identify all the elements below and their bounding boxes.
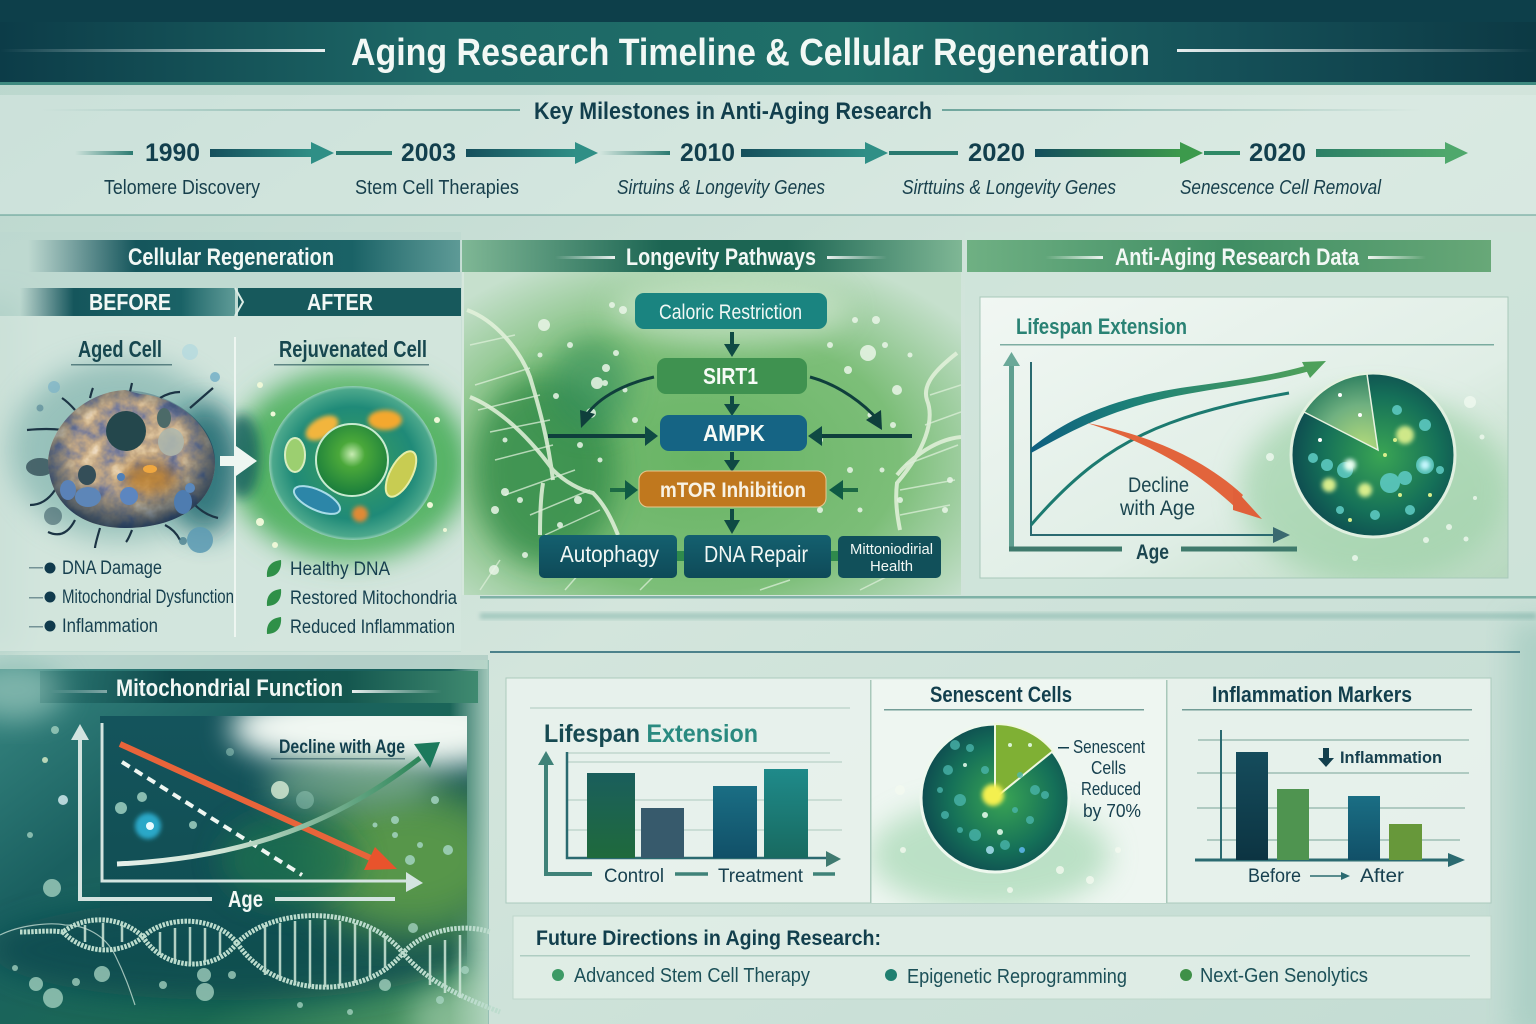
particles — [12, 726, 469, 1015]
icon: aged cell — [26, 344, 220, 553]
card sparkles — [1266, 396, 1484, 561]
icon: rejuvenated cell — [253, 363, 453, 563]
milestone 2020 second — [1180, 139, 1468, 199]
arrow: caloric to sirt1 — [724, 332, 740, 357]
node: ampk — [660, 415, 807, 451]
arrow: ampk to mtor — [724, 452, 740, 472]
dna helix — [0, 916, 500, 1012]
data heading: Anti-Aging Research Data — [1115, 244, 1360, 271]
age label: Age — [228, 886, 263, 912]
milestone 2020 first — [889, 139, 1203, 199]
node: autophagy: Autophagy — [560, 541, 659, 567]
cellular regeneration heading — [28, 240, 460, 272]
node: dna repair: DNA Repair — [704, 541, 808, 567]
milestone 2010: 2010 — [680, 139, 735, 167]
rejuvenated cell label: Rejuvenated Cell — [279, 336, 427, 362]
mito chart — [71, 716, 467, 959]
decline label: Decline with Age — [279, 737, 405, 758]
before after bar: AFTER — [307, 289, 373, 315]
connectors between outcome boxes — [670, 551, 844, 561]
milestone 2020 first: 2020 — [968, 139, 1025, 167]
card: lifespan bar chart: Lifespan Extension — [544, 720, 758, 748]
after list: Reduced Inflammation — [290, 617, 455, 638]
node: caloric restriction — [635, 293, 827, 329]
mito heading: Mitochondrial Function — [116, 675, 343, 702]
timeline heading: Key Milestones in Anti-Aging Research — [534, 98, 932, 125]
node: ampk: AMPK — [703, 420, 765, 446]
card: senescent cells: Reduced — [1081, 779, 1141, 799]
card: senescent cells: Senescent Cells — [930, 682, 1072, 707]
line chart: Decline — [1128, 474, 1189, 497]
before list — [29, 558, 234, 637]
title banner: Aging Research Timeline & Cellular Regeneration — [351, 32, 1150, 74]
node: mtor inhibition — [639, 471, 826, 507]
card: senescent cells: by 70% — [1083, 801, 1141, 821]
node: dna repair — [684, 535, 831, 578]
line chart: with Age — [1119, 497, 1195, 520]
after list — [267, 559, 457, 638]
node: mtor inhibition: mTOR Inhibition — [660, 479, 806, 502]
lifespan chart card — [980, 297, 1510, 585]
after list: Restored Mitochondria — [290, 588, 457, 609]
milestone 2010: Sirtuins & Longevity Genes — [617, 177, 825, 199]
timeline section — [0, 95, 1536, 216]
milestone 2003: Stem Cell Therapies — [355, 177, 519, 199]
card: inflammation markers — [1182, 682, 1472, 887]
milestone 2010 — [600, 139, 888, 199]
section rules — [480, 596, 1536, 653]
pie: cell particles — [1291, 373, 1455, 537]
before list: Inflammation — [62, 616, 158, 637]
card: inflammation markers: Before — [1248, 866, 1301, 887]
card: senescent cells — [870, 680, 1168, 910]
milestone 2003: 2003 — [401, 139, 456, 167]
panel: future directions: Next-Gen Senolytics — [1200, 965, 1368, 987]
line chart — [1003, 352, 1326, 564]
before list: Mitochondrial Dysfunction — [62, 587, 234, 608]
card: senescent cells: Senescent — [1073, 737, 1145, 757]
panel: future directions: Epigenetic Reprogramming — [907, 966, 1127, 988]
milestone 1990 — [75, 139, 334, 199]
node: sirt1 — [657, 358, 807, 394]
panel: future directions: Advanced Stem Cell Therapy — [574, 965, 810, 987]
milestone 2020 second: Senescence Cell Removal — [1180, 177, 1381, 199]
line chart: Age — [1136, 541, 1169, 564]
cellular regeneration heading: Cellular Regeneration — [128, 244, 334, 271]
card: lifespan bar chart: Treatment — [718, 866, 804, 887]
panel: cellular regeneration — [0, 232, 470, 652]
longevity heading — [462, 240, 962, 272]
panel: mitochondrial function — [0, 655, 550, 1024]
node: mitochondrial health: Health — [870, 558, 913, 575]
milestone 2020 first: Sirttuins & Longevity Genes — [902, 177, 1116, 199]
panel: bottom charts — [506, 678, 1491, 910]
milestone 1990: Telomere Discovery — [104, 177, 260, 199]
card: lifespan bar chart: Control — [604, 866, 664, 887]
after list: Healthy DNA — [290, 559, 390, 580]
panel: future directions — [513, 916, 1491, 999]
card: inflammation markers: Inflammation — [1340, 748, 1442, 767]
milestone 2020 second: 2020 — [1249, 139, 1306, 167]
aged cell label: Aged Cell — [78, 336, 162, 362]
panel: longevity pathways — [462, 240, 962, 595]
node: autophagy — [539, 535, 677, 578]
before after bar — [20, 288, 461, 316]
card: inflammation markers: Inflammation Markers — [1212, 682, 1412, 707]
arrow: sirt1 to ampk — [724, 396, 740, 416]
node: caloric restriction: Caloric Restriction — [659, 301, 802, 324]
after background — [224, 370, 470, 560]
milestone 1990: 1990 — [145, 139, 200, 167]
before list: DNA Damage — [62, 558, 162, 579]
node: sirt1: SIRT1 — [703, 363, 758, 389]
node: mitochondrial health — [838, 536, 941, 578]
node: mitochondrial health: Mittoniodirial — [850, 541, 933, 558]
before after bar: BEFORE — [89, 289, 171, 315]
card: senescent cells: Cells — [1091, 758, 1126, 778]
title banner — [0, 0, 1536, 85]
lifespan heading: Lifespan Extension — [1016, 314, 1187, 339]
milestone 2003 — [336, 139, 598, 199]
panel: future directions: Future Directions in Aging Research: — [536, 927, 881, 950]
arrows: side feedback — [548, 377, 912, 500]
panel: anti-aging research data — [967, 240, 1508, 578]
longevity heading: Longevity Pathways — [626, 244, 816, 271]
card: inflammation markers: After — [1360, 866, 1405, 887]
arrow: before to after — [220, 446, 257, 476]
before background — [10, 360, 243, 540]
arrow: mtor down — [724, 509, 740, 534]
card: lifespan bar chart — [530, 708, 850, 887]
background dna and particles — [467, 275, 961, 590]
mito heading — [40, 671, 478, 703]
